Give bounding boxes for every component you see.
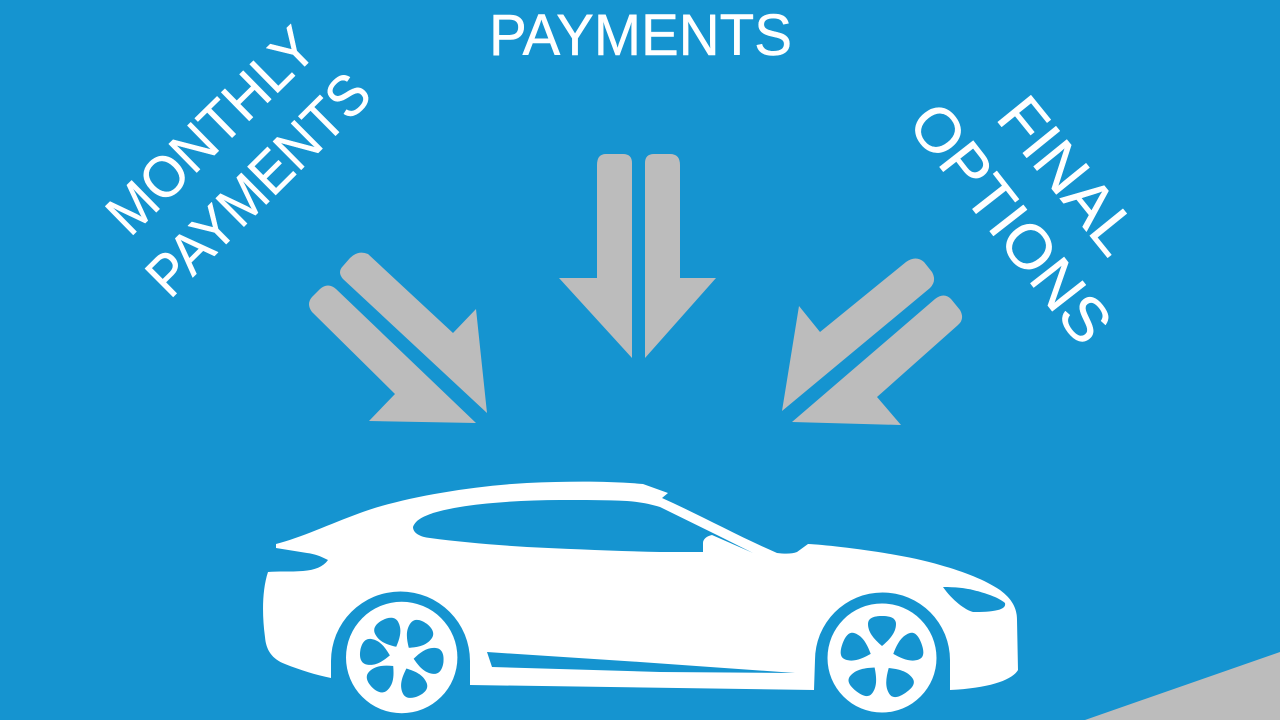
label: monthly payments: PAYMENTS [133, 60, 384, 309]
label: final options: OPTIONS [895, 90, 1125, 357]
arrow: right diagonal double arrow [782, 258, 962, 425]
grey road corner [1085, 652, 1280, 720]
car [263, 482, 1018, 713]
car side window [413, 500, 753, 553]
car body [263, 482, 1018, 690]
label: monthly payments: MONTHLY [94, 14, 329, 247]
car headlight [943, 587, 1005, 612]
heading: payments: PAYMENTS [489, 3, 792, 68]
front wheel [828, 604, 936, 712]
car side sill cut [487, 652, 795, 673]
arrow: left diagonal double arrow [309, 253, 487, 423]
arrow: centre downward double arrow [559, 154, 716, 358]
label: final options: FINAL [984, 83, 1152, 268]
rear wheel [346, 602, 457, 713]
